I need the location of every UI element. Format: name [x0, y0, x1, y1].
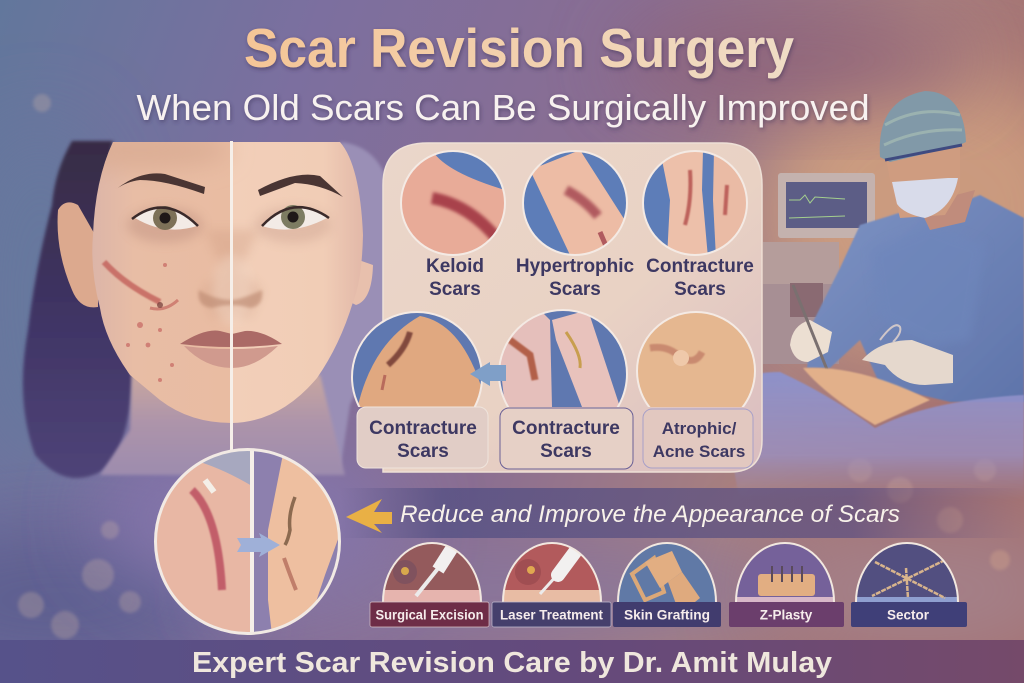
arrow: gold	[346, 499, 392, 533]
lips	[180, 331, 282, 347]
surgeon illustration	[732, 91, 1024, 500]
scar photo: contracture shoulder	[351, 311, 483, 407]
mask	[892, 178, 958, 218]
treatment: z-plasty	[729, 540, 844, 627]
treatment: sector: Sector	[887, 608, 930, 622]
scar photo: atrophic	[636, 311, 756, 407]
treatment: skin grafting: Skin Grafting	[624, 608, 710, 622]
left cheek scar	[104, 262, 160, 302]
drapes	[732, 372, 1024, 500]
label: keloid: Scars	[429, 279, 481, 300]
label: contracture: Scars	[674, 279, 726, 300]
treatment: laser	[492, 540, 611, 627]
treatment: surgical excision	[370, 540, 489, 627]
gown	[807, 195, 1024, 402]
card: contracture 2: Contracture	[512, 418, 620, 439]
inset: before and after scar	[155, 449, 345, 635]
card: atrophic: Acne Scars	[653, 442, 745, 461]
patient torso	[803, 368, 930, 425]
divider line	[230, 141, 233, 451]
neck	[918, 190, 975, 230]
ears	[58, 202, 98, 307]
band: benefit statement: Reduce and Improve the Appearance of Scars	[400, 501, 900, 528]
surgical cap	[880, 91, 966, 162]
face base	[92, 142, 232, 423]
facial shading	[100, 142, 215, 177]
arrow: inset	[237, 533, 280, 557]
card: contracture: Scars	[397, 441, 449, 462]
treatment: laser: Laser Treatment	[500, 608, 603, 622]
label: hypertrophic: Hypertrophic	[516, 256, 635, 277]
band: benefit statement	[340, 488, 1024, 538]
neck	[100, 370, 345, 475]
arrow: blue left	[470, 362, 506, 386]
treatment: z-plasty: Z-Plasty	[760, 608, 813, 622]
card: atrophic: Atrophic/	[662, 419, 737, 438]
treatment: sector	[851, 540, 967, 627]
scar photo: contracture arm	[498, 309, 628, 407]
card: contracture	[357, 407, 488, 468]
monitor and equipment	[763, 173, 875, 364]
face	[885, 140, 960, 218]
label: contracture: Contracture	[646, 256, 754, 277]
hair	[23, 141, 132, 478]
card: atrophic	[643, 409, 753, 468]
card: contracture 2: Scars	[540, 441, 592, 462]
label: hypertrophic: Scars	[549, 279, 601, 300]
nose	[199, 290, 262, 308]
card: contracture 2	[500, 408, 633, 469]
instruments	[793, 285, 832, 382]
label: keloid: Keloid	[426, 256, 484, 277]
scar photo: contracture legs	[644, 152, 746, 254]
scar photo: keloid	[400, 150, 506, 256]
portrait: before and after face	[23, 130, 387, 478]
subtitle: When Old Scars Can Be Surgically Improved	[136, 87, 870, 128]
eyes and brows	[115, 173, 205, 194]
footer banner	[0, 640, 1024, 683]
footer banner: Expert Scar Revision Care by Dr. Amit Mulay	[192, 647, 832, 679]
treatment: skin grafting	[613, 540, 721, 627]
scar photo: hypertrophic	[522, 150, 628, 258]
card: contracture: Contracture	[369, 418, 477, 439]
title: Scar Revision Surgery	[244, 17, 794, 79]
gloves	[790, 320, 832, 362]
treatment: surgical excision: Surgical Excision	[376, 608, 484, 622]
panel: scar types	[350, 143, 762, 472]
